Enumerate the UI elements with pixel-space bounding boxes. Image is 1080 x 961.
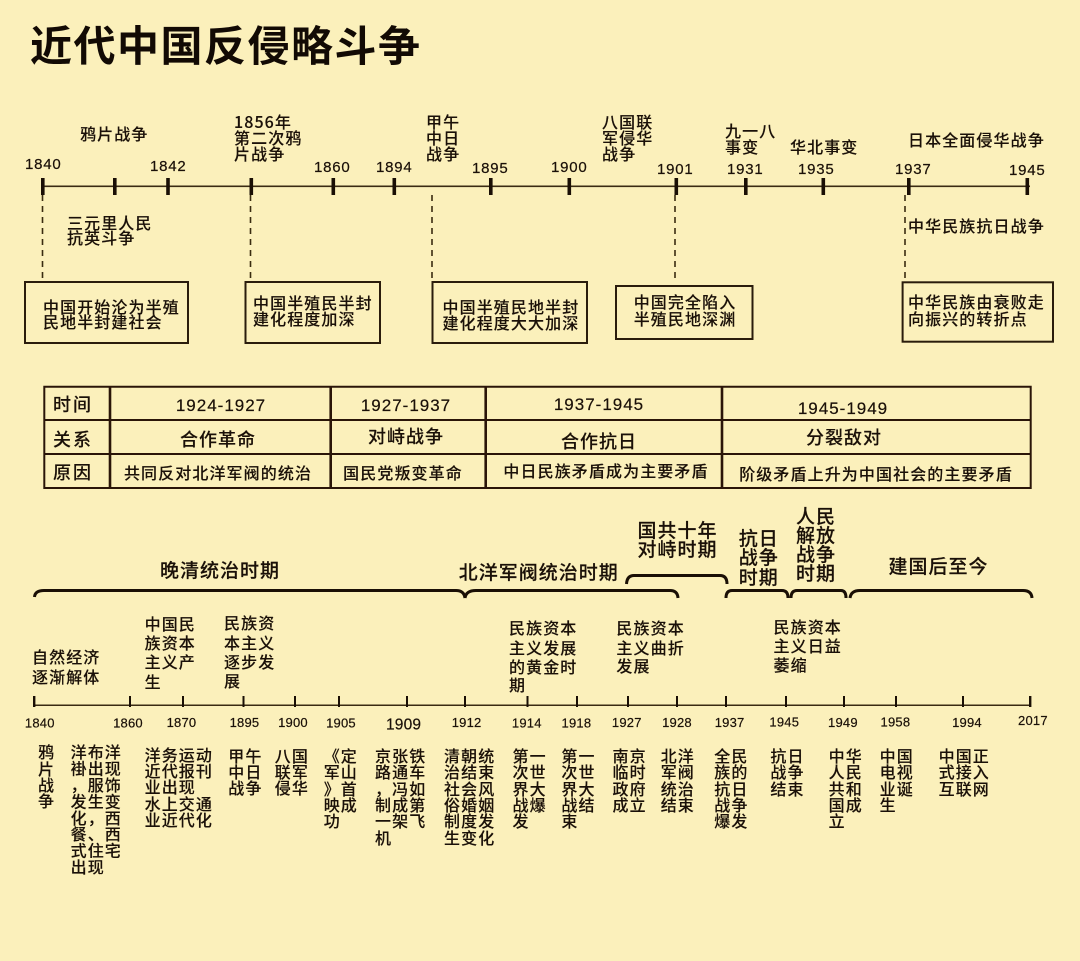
note: 民族资本主义曲折发展: 主义曲折 [616, 635, 685, 659]
table: 国共关系: 1937-1945 [554, 395, 644, 414]
note: 民族资本主义逐步发展: 本主义 [224, 630, 275, 654]
timeline: modern society: 1914 [512, 716, 542, 730]
event: 1909 京张铁路: 制成第 [375, 792, 426, 816]
timeline: modern society: 1909 [386, 716, 421, 734]
event: 1918 一战结束: 战结 [561, 792, 596, 816]
event: 1870 洋务运动: 水上交通 [145, 791, 213, 815]
note: 民族资本主义曲折发展: 发展 [616, 653, 651, 677]
period heading: 国共十年对峙时期: 国共十年 [638, 516, 718, 543]
timeline: modern society: 1945 [769, 714, 799, 730]
timeline: modern society: 1927 [612, 715, 642, 730]
note: 民族资本主义发展的黄金时期: 主义发展 [509, 635, 577, 659]
event: 1900 八国联军侵华: 侵华 [275, 775, 309, 799]
title: 近代中国反侵略斗争 [30, 13, 422, 74]
event: 1912 清朝统治结束: 治结束 [444, 759, 495, 783]
event: 1912 清朝统治结束: 社会风 [444, 776, 495, 800]
event label: 三元里人民抗英斗争: 抗英斗争 [67, 225, 135, 249]
event: 1900 八国联军侵华: 八国 [275, 743, 309, 767]
callout: 1894 [432, 282, 587, 343]
callout: 1894: 中国半殖民地半封 [442, 294, 579, 318]
event: 1905 定军山: 映成 [324, 792, 358, 816]
event: 1840 鸦片战争: 片 [38, 756, 55, 780]
table: 国共关系: 合作革命 [180, 426, 256, 452]
event: 1949 新中国成立: 国成 [829, 792, 863, 816]
event: 1927 南京临时政府: 政府 [612, 776, 647, 800]
table: 国共关系: 共同反对北洋军阀的统治 [124, 460, 312, 484]
event: 1860 洋布洋褂: 式住宅 [71, 838, 122, 862]
callout: 1937: 中华民族由衰败走 [908, 289, 1045, 313]
event: 1937 全民族抗日战争: 全民 [714, 743, 749, 767]
event: 1994 接入互联网: 互联网 [939, 776, 990, 800]
event: 1949 新中国成立: 人民 [829, 759, 863, 783]
event label: 甲午中日战争: 战争 [426, 141, 460, 165]
timeline: modern society: 1912 [452, 715, 481, 730]
event: 1994 接入互联网: 中国正 [939, 743, 990, 767]
event: 1914 一战爆发: 战爆 [512, 792, 547, 816]
timeline: invasion wars: 1894 [376, 159, 413, 176]
event label: 第二次鸦片战争: 片战争 [234, 141, 285, 165]
period heading: 人民解放战争时期: 战争 [796, 540, 836, 567]
callout: 1901: 中国完全陷入 [634, 289, 736, 313]
event: 1912 清朝统治结束: 清朝统 [444, 743, 495, 767]
note: 民族资本主义日益萎缩: 主义日益 [774, 633, 842, 657]
event: 1937 全民族抗日战争: 爆发 [714, 808, 749, 832]
event: 1912 清朝统治结束: 生变化 [444, 825, 495, 849]
event label: 甲午中日战争: 中日 [426, 125, 460, 149]
callout: 1840: 民地半封建社会 [43, 309, 163, 333]
event: 1945 抗日战争结束: 结束 [770, 776, 805, 800]
table: 国共关系: 分裂敌对 [806, 424, 882, 450]
event: 1860 洋布洋褂: 化，西 [71, 805, 122, 829]
timeline: modern society: 1870 [167, 715, 196, 730]
period heading: 晚清统治时期: 晚清统治时期 [160, 556, 280, 583]
event: 1870 洋务运动: 近代报刊 [145, 758, 213, 782]
event label: 八国联军侵华战争: 八国联 [602, 109, 653, 133]
event: 1945 抗日战争结束: 抗日 [770, 743, 805, 767]
note: 民族资本主义发展的黄金时期: 的黄金时 [509, 654, 577, 678]
event: 1918 一战结束: 第一 [561, 743, 596, 767]
event: 1928 北洋军阀统治结束: 结束 [661, 792, 695, 816]
event label: 三元里人民抗英斗争: 三元里人民 [67, 210, 153, 234]
period heading: 人民解放战争时期: 解放 [796, 521, 836, 548]
event label: 八国联军侵华战争: 军侵华 [602, 125, 653, 149]
period brackets [34, 576, 1032, 598]
period heading: 国共十年对峙时期: 对峙时期 [638, 535, 718, 562]
note: 民族资本主义发展的黄金时期: 民族资本 [509, 615, 577, 639]
table: 国共关系: 关系 [53, 426, 93, 452]
event: 1958 中国电视业诞生: 业诞 [880, 776, 914, 800]
table: 国共关系: 时间 [53, 391, 93, 417]
callout: 1937 [903, 282, 1053, 342]
timeline: modern society: 1958 [881, 714, 910, 730]
event: 1918 一战结束: 束 [561, 808, 579, 832]
event label: 第二次鸦片战争: 第二次鸦 [234, 125, 302, 149]
event: 1870 洋务运动: 洋务运动 [145, 742, 213, 766]
timeline: invasion wars: 1901 [657, 161, 694, 178]
note: 中国民族资本主义产生: 族资本 [145, 630, 196, 654]
callout: 1856: 建化程度加深 [253, 306, 356, 330]
period heading: 抗日战争时期: 抗日 [739, 524, 779, 551]
event: 1928 北洋军阀统治结束: 北洋 [661, 743, 695, 767]
callout: 1840: 中国开始沦为半殖 [43, 294, 180, 318]
event: 1937 全民族抗日战争: 战争 [714, 792, 749, 816]
event label: 九一八事变: 事变 [725, 134, 759, 158]
callout: 1856: 中国半殖民半封 [253, 290, 373, 314]
table: 国共关系: 1945-1949 [798, 399, 888, 418]
event: 1900 八国联军侵华: 联军 [275, 759, 309, 783]
event: 1918 一战结束: 界大 [561, 776, 596, 800]
table: 国共关系: 合作抗日 [561, 428, 637, 454]
period heading: 人民解放战争时期: 时期 [796, 559, 836, 586]
event label: 华北事变: 华北事变 [790, 134, 858, 158]
event: 1860 洋布洋褂: 发生变 [71, 788, 122, 812]
note: 民族资本主义发展的黄金时期: 期 [509, 672, 526, 696]
event: 1928 北洋军阀统治结束: 统治 [661, 776, 695, 800]
event: 1909 京张铁路: ，冯如 [375, 776, 426, 800]
note: 民族资本主义逐步发展: 展 [224, 668, 241, 692]
note: 中国民族资本主义产生: 生 [145, 669, 162, 693]
timeline: invasion wars: 1935 [798, 161, 835, 178]
dashed connectors [42, 195, 905, 282]
timeline: invasion wars: 1895 [472, 160, 509, 177]
event: 1909 京张铁路: 路通车 [375, 759, 426, 783]
event: 1909 京张铁路: 一架飞 [375, 808, 426, 832]
event: 1905 定军山: 》首 [324, 776, 358, 800]
timeline: invasion wars: 1945 [1009, 162, 1046, 179]
event: 1912 清朝统治结束: 俗婚姻 [444, 792, 495, 816]
timeline: invasion wars: 1842 [150, 158, 187, 175]
table: 国共关系: 中日民族矛盾成为主要矛盾 [503, 458, 709, 482]
timeline: invasion wars: 1860 [314, 159, 351, 176]
timeline: modern society: 1860 [113, 716, 143, 730]
note: 民族资本主义日益萎缩: 萎缩 [774, 652, 808, 676]
callout: 1840 [25, 282, 188, 343]
event: 1860 洋布洋褂: 出现 [71, 854, 105, 878]
note: 民族资本主义逐步发展: 民族资 [224, 610, 275, 634]
event: 1958 中国电视业诞生: 中国 [880, 743, 914, 767]
table: 国共关系: 1924-1927 [176, 396, 266, 415]
timeline: modern society: 1937 [715, 715, 744, 730]
event: 1895 甲午中日战争: 中日 [228, 759, 263, 783]
event: 1958 中国电视业诞生: 生 [880, 792, 897, 816]
timeline: invasion wars: 1931 [727, 161, 764, 178]
period heading: 建国后至今: 建国后至今 [888, 552, 989, 579]
timeline: invasion wars: 1900 [551, 159, 588, 176]
event label: 中华民族抗日战争: 中华民族抗日战争 [908, 213, 1045, 237]
table: 国共关系: 原因 [53, 459, 93, 485]
period heading: 人民解放战争时期: 人民 [796, 502, 836, 529]
event: 1895 甲午中日战争: 甲午 [228, 743, 263, 767]
event: 1949 新中国成立: 共和 [829, 776, 863, 800]
event: 1918 一战结束: 次世 [561, 759, 596, 783]
table: 国共关系: 1927-1937 [361, 396, 451, 415]
event label: 八国联军侵华战争: 战争 [602, 141, 636, 165]
event: 1994 接入互联网: 式接入 [939, 759, 990, 783]
timeline: modern society: 1895 [230, 715, 259, 730]
event: 1914 一战爆发: 次世 [512, 759, 547, 783]
event: 1914 一战爆发: 发 [512, 808, 530, 832]
note: 民族资本主义日益萎缩: 民族资本 [774, 614, 842, 638]
event label: 鸦片战争: 鸦片战争 [80, 121, 148, 145]
event: 1905 定军山: 《定 [324, 743, 358, 767]
timeline: modern society: 1900 [278, 715, 308, 730]
table: 国共关系: 对峙战争 [368, 423, 444, 449]
period heading: 抗日战争时期: 战争 [739, 543, 779, 570]
event: 1905 定军山: 军山 [324, 759, 358, 783]
note: 民族资本主义曲折发展: 民族资本 [616, 615, 685, 639]
timeline: modern society: 1840 [25, 716, 55, 730]
timeline: modern society: 1905 [326, 716, 356, 730]
event label: 甲午中日战争: 甲午 [426, 109, 460, 133]
event: 1958 中国电视业诞生: 电视 [880, 759, 914, 783]
event label: 九一八事变: 九一八 [725, 118, 776, 142]
event: 1927 南京临时政府: 成立 [612, 792, 647, 816]
event: 1840 鸦片战争: 鸦 [38, 739, 55, 763]
event: 1860 洋布洋褂: 褂出现 [71, 756, 122, 780]
table: 国共关系 [44, 387, 1031, 488]
event: 1860 洋布洋褂: ，服饰 [71, 772, 122, 796]
event: 1914 一战爆发: 界大 [512, 776, 547, 800]
timeline: modern society: 1918 [562, 716, 591, 730]
timeline: modern society: 1994 [952, 715, 982, 730]
event: 1860 洋布洋褂: 餐、西 [71, 821, 122, 845]
event: 1912 清朝统治结束: 制度发 [444, 808, 495, 832]
note: 中国民族资本主义产生: 中国民 [145, 611, 196, 635]
event label: 日本全面侵华战争: 日本全面侵华战争 [908, 127, 1045, 151]
event: 1909 京张铁路: 机 [375, 825, 392, 849]
callout: 1894: 建化程度大大加深 [442, 310, 579, 334]
timeline: modern society: 2017 [1018, 713, 1048, 728]
timeline: modern society: 1949 [828, 715, 858, 730]
event: 1927 南京临时政府: 临时 [612, 759, 647, 783]
timeline: invasion wars: 1937 [895, 161, 932, 178]
event: 1905 定军山: 功 [324, 808, 341, 832]
note: 自然经济逐渐解体: 逐渐解体 [32, 664, 100, 688]
event: 1909 京张铁路: 京张铁 [375, 743, 426, 767]
event: 1895 甲午中日战争: 战争 [228, 775, 263, 799]
callout: 1901 [616, 286, 752, 339]
event: 1840 鸦片战争: 战 [38, 772, 55, 796]
period heading: 抗日战争时期: 时期 [739, 563, 779, 590]
callout: 1937: 向振兴的转折点 [908, 306, 1028, 330]
note: 中国民族资本主义产生: 主义产 [145, 649, 196, 673]
event: 1949 新中国成立: 立 [829, 808, 846, 832]
event: 1928 北洋军阀统治结束: 军阀 [661, 759, 695, 783]
timeline: modern society: 1928 [662, 715, 692, 730]
note: 自然经济逐渐解体: 自然经济 [32, 644, 100, 668]
event: 1945 抗日战争结束: 战争 [770, 759, 805, 783]
callout: 1901: 半殖民地深渊 [634, 306, 736, 330]
callout: 1856 [246, 282, 380, 343]
timeline: modern society [25, 696, 1048, 734]
event: 1840 鸦片战争: 争 [38, 788, 55, 812]
timeline: invasion wars [25, 156, 1046, 195]
event: 1949 新中国成立: 中华 [829, 743, 863, 767]
event: 1937 全民族抗日战争: 族的 [714, 759, 749, 783]
period heading: 北洋军阀统治时期: 北洋军阀统治时期 [459, 558, 619, 585]
event: 1870 洋务运动: 业出现 [145, 774, 196, 798]
event: 1927 南京临时政府: 南京 [612, 743, 647, 767]
table: 国共关系: 国民党叛变革命 [343, 460, 463, 484]
event: 1860 洋布洋褂: 洋布洋 [71, 739, 122, 763]
event: 1870 洋务运动: 业近代化 [145, 807, 213, 831]
event label: 第二次鸦片战争: 1856年 [234, 109, 292, 133]
event: 1914 一战爆发: 第一 [512, 743, 547, 767]
event: 1937 全民族抗日战争: 抗日 [714, 776, 749, 800]
note: 民族资本主义逐步发展: 逐步发 [224, 649, 275, 673]
timeline: invasion wars: 1840 [25, 156, 62, 173]
table: 国共关系: 阶级矛盾上升为中国社会的主要矛盾 [739, 461, 1013, 485]
